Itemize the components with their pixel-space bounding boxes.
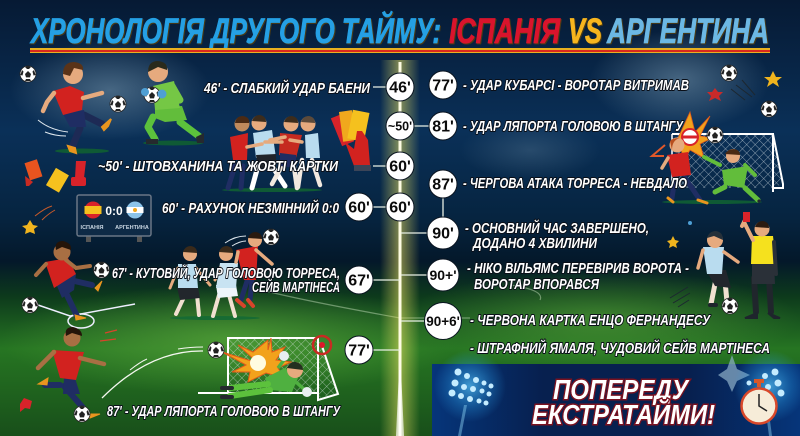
timeline minute markers: 81' <box>432 118 454 136</box>
right event labels: - НІКО ВІЛЬЯМС ПЕРЕВІРИВ ВОРОТА - <box>467 261 689 277</box>
left event labels: 67' - КУТОВИЙ, УДАР ГОЛОВОЮ ТОРРЕСА, <box>112 264 340 282</box>
shot trail and goal with keeper <box>102 336 338 400</box>
banner: extra time ahead: ЕКСТРАТАЙМИ! <box>532 398 715 430</box>
scoreboard <box>77 195 151 242</box>
left event labels: СЕЙВ МАРТІНЕСА <box>252 278 340 296</box>
right event labels: - УДАР ЛЯПОРТА ГОЛОВОЮ В ШТАНГУ <box>463 119 684 135</box>
left event labels <box>98 79 370 420</box>
player: shot 87 <box>20 327 117 422</box>
timeline minute markers: 90+6' <box>426 314 460 329</box>
icon: stopwatch <box>742 379 776 424</box>
player: Baena kicking <box>20 62 126 154</box>
right event labels: - ОСНОВНИЙ ЧАС ЗАВЕРШЕНО, <box>465 219 649 237</box>
scoreboard: 0:0 <box>105 204 123 218</box>
timeline minute markers: 77' <box>348 342 370 360</box>
scoreboard: АРГЕНТИНА <box>115 225 149 231</box>
players: corner header <box>170 229 279 320</box>
left event labels: 87' - УДАР ЛЯПОРТА ГОЛОВОЮ В ШТАНГУ <box>107 404 341 420</box>
right event labels: - ЧЕРВОНА КАРТКА ЕНЦО ФЕРНАНДЕСУ <box>470 313 711 329</box>
timeline minute markers <box>345 71 462 364</box>
left event labels: 60' - РАХУНОК НЕЗМІННИЙ 0:0 <box>162 199 339 217</box>
right event labels: ДОДАНО 4 ХВИЛИНИ <box>471 236 597 252</box>
left event labels: ~50' - ШТОВХАНИНА ТА ЖОВТІ КАРТКИ <box>98 159 338 175</box>
players: scuffle <box>222 115 322 192</box>
right event labels: - УДАР КУБАРСІ - ВОРОТАР ВИТРИМАВ <box>463 78 689 94</box>
icon: hand with cards <box>331 110 371 171</box>
timeline minute markers: ~50' <box>388 120 412 134</box>
goal and header collision right <box>652 112 783 204</box>
right event labels: ВОРОТАР ВПОРАВСЯ <box>474 277 599 293</box>
timeline minute markers: 60' <box>389 158 411 176</box>
timeline minute markers: 90' <box>432 226 454 242</box>
timeline spine <box>373 62 443 436</box>
icon: cards left <box>25 159 86 193</box>
player: corner kick <box>22 241 135 328</box>
decorative balls and stars top right <box>22 65 782 234</box>
right event labels: - ЧЕРГОВА АТАКА ТОРРЕСА - НЕВДАЛО <box>463 176 688 192</box>
timeline minute markers: 60' <box>389 200 411 216</box>
title: ІСПАНІЯ <box>449 12 561 51</box>
right event labels <box>463 78 770 357</box>
timeline minute markers: 60' <box>348 200 370 216</box>
title <box>30 10 770 53</box>
banner: extra time ahead: ПОПЕРЕДУ <box>553 374 690 405</box>
title: VS <box>568 12 602 51</box>
banner: extra time ahead <box>432 350 800 436</box>
player: goalkeeper with ball <box>141 61 204 146</box>
timeline minute markers: 67' <box>348 272 370 290</box>
title: ХРОНОЛОГІЯ ДРУГОГО ТАЙМУ: <box>30 10 441 51</box>
timeline minute markers: 77' <box>432 78 454 94</box>
timeline minute markers: 90+' <box>429 267 457 283</box>
timeline minute markers: 46' <box>389 80 411 96</box>
timeline minute markers: 87' <box>432 176 454 194</box>
scoreboard: ІСПАНІЯ <box>81 225 103 231</box>
player and referee: red card <box>667 212 780 318</box>
left event labels: 46' - СЛАБКИЙ УДАР БАЕНИ <box>203 79 370 97</box>
